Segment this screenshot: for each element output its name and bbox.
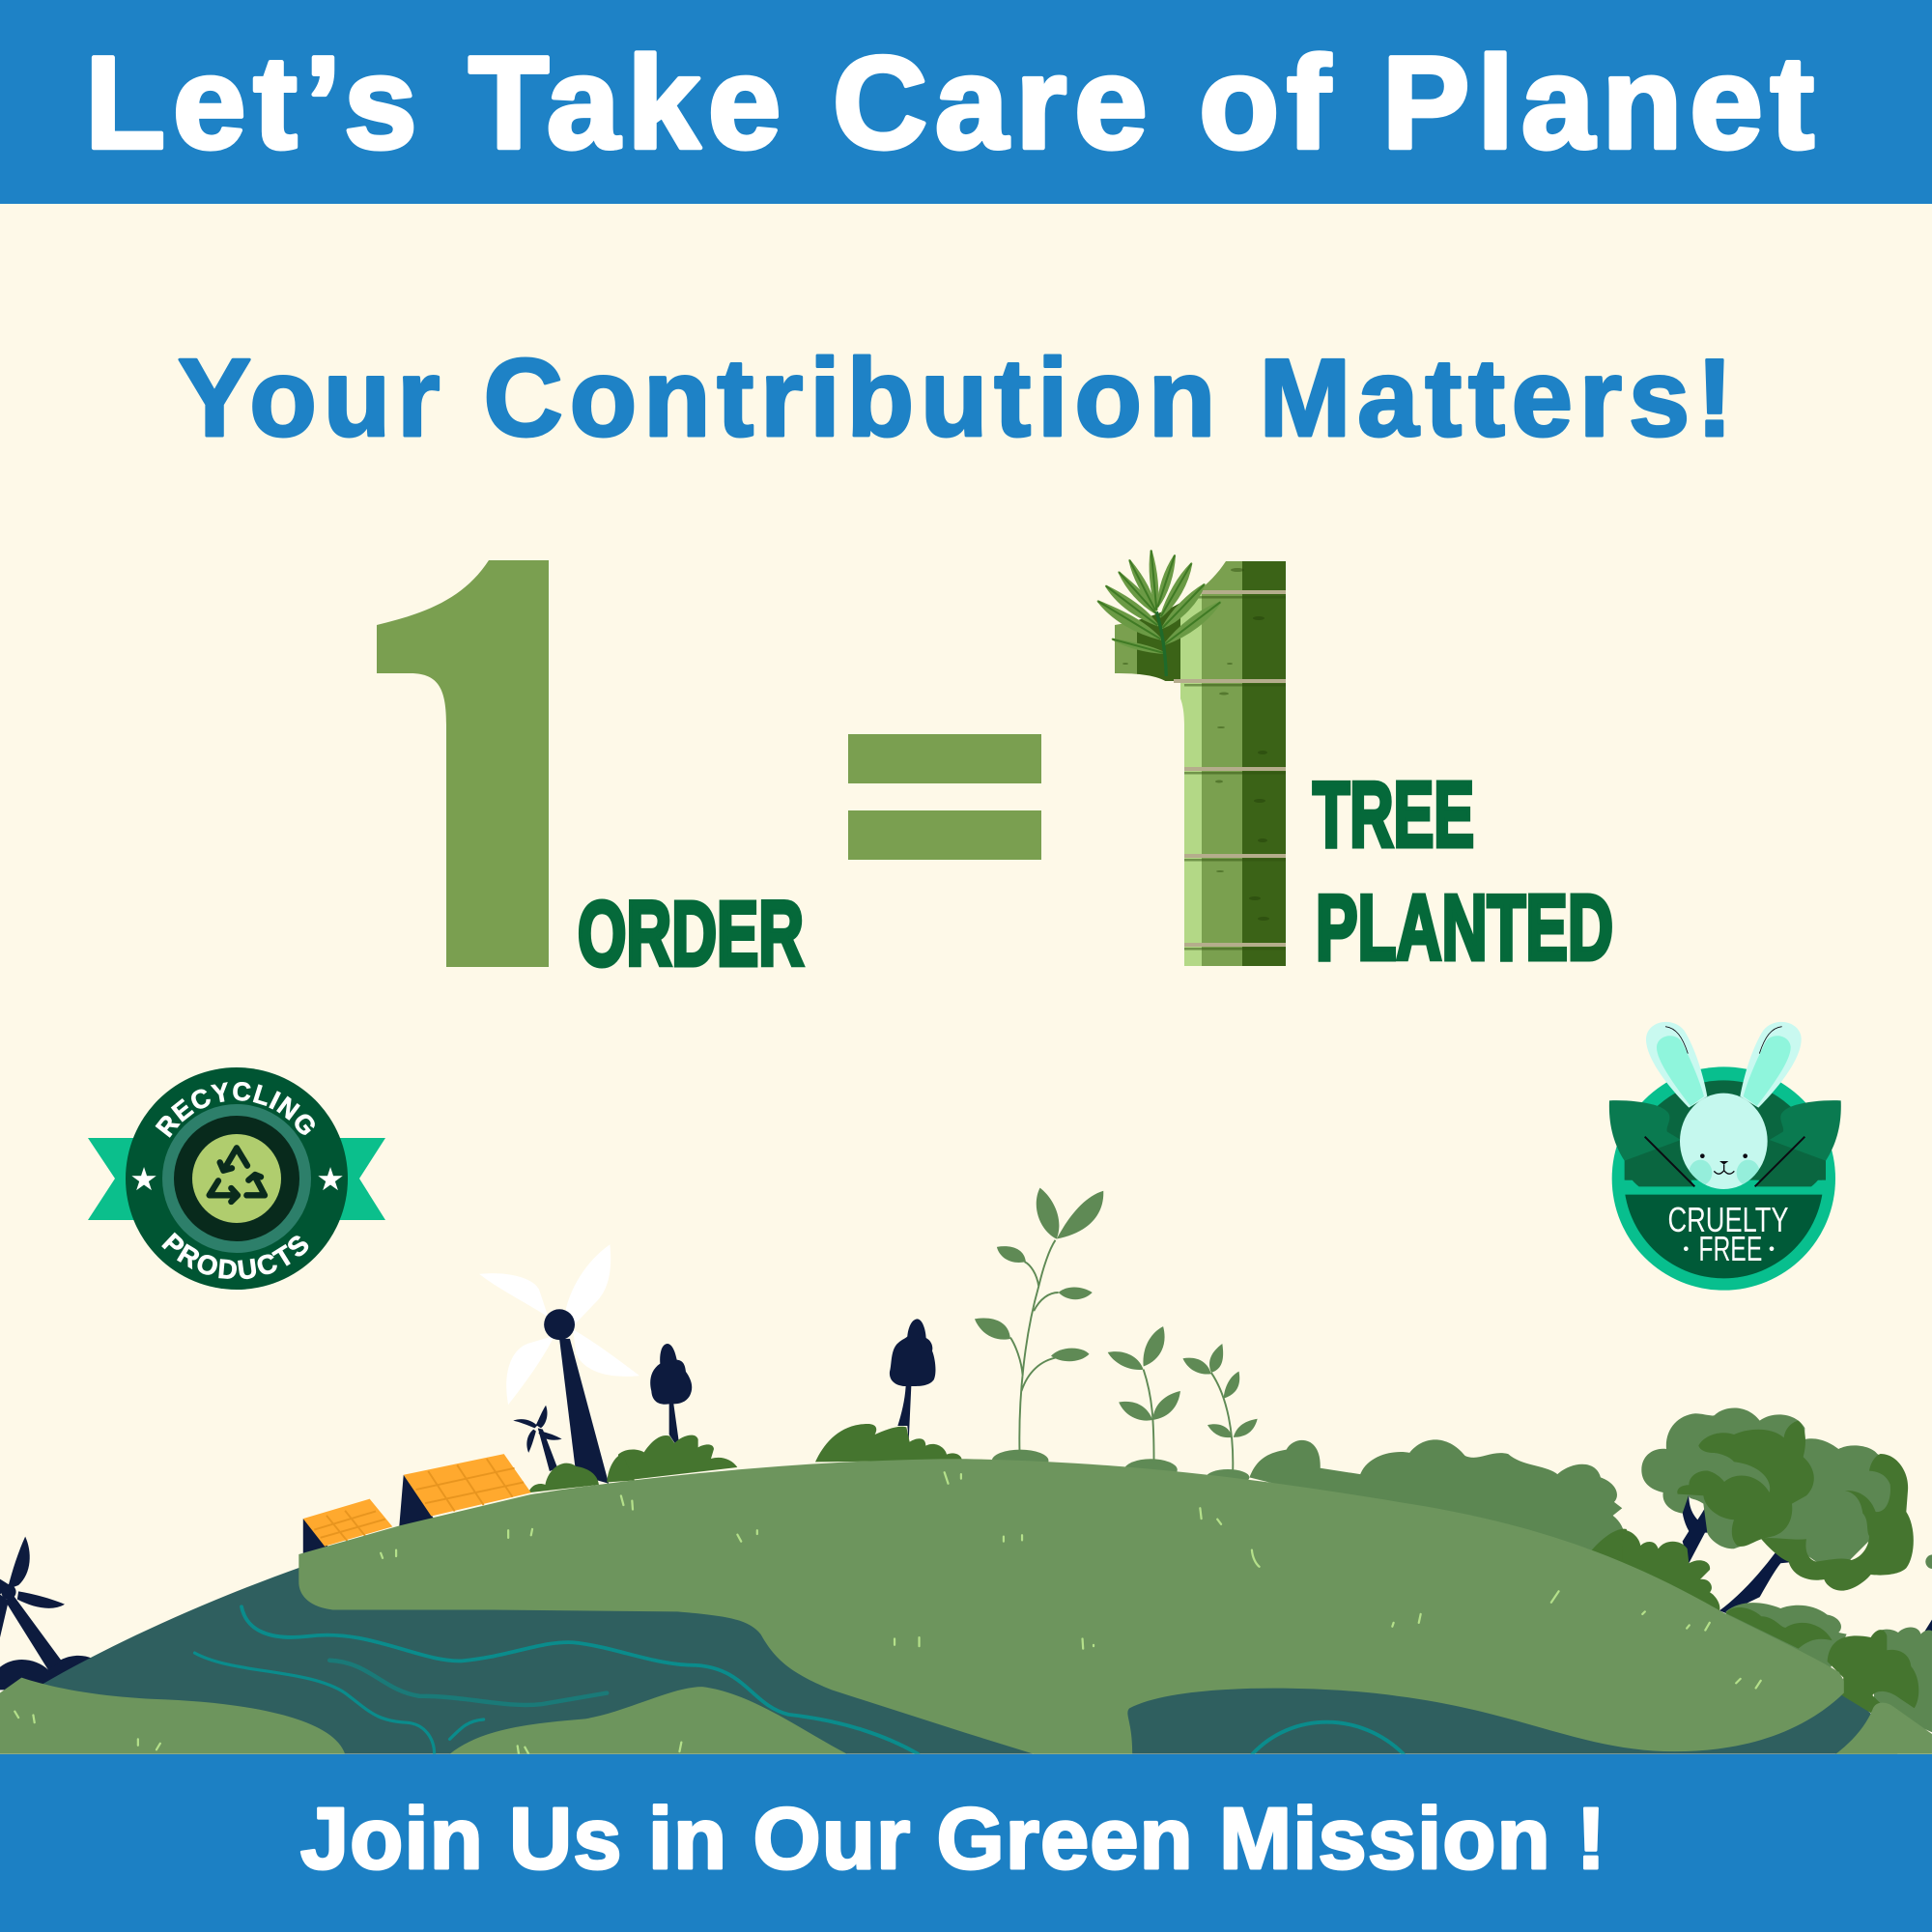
landscape illustration: [0, 1188, 1932, 1756]
grass ticks: [14, 1472, 1761, 1754]
sprout 3: [1182, 1344, 1258, 1486]
water hillside: [0, 1568, 1897, 1754]
back bush right: [1249, 1439, 1625, 1560]
small crest bush: [528, 1463, 599, 1492]
bamboo rope bands: [1174, 590, 1290, 947]
subheading: Your Contribution Matters!: [178, 337, 1733, 460]
recycling arrows icon: [210, 1148, 265, 1202]
rabbit left ear: [1646, 1022, 1707, 1108]
right trees and bush cluster: [1623, 1408, 1932, 1756]
crest bush left edge: [607, 1454, 635, 1482]
sprout 2: [1108, 1326, 1180, 1481]
badge: recycling products: [88, 1067, 385, 1290]
solar panel small: [303, 1499, 392, 1554]
curved text bottom: PRODUCTS: [161, 1233, 309, 1279]
badge stars: ★: [129, 1160, 158, 1198]
left bottom hill: [0, 1678, 345, 1754]
left leaves: [1609, 1100, 1693, 1186]
bamboo numeral one: [1098, 551, 1290, 971]
badge: cruelty free: [1609, 1022, 1841, 1291]
sprout 1: [975, 1188, 1103, 1472]
solar panel large: [399, 1454, 531, 1526]
small windmill: [513, 1406, 562, 1471]
rabbit head: [1680, 1094, 1768, 1189]
equals sign: [848, 734, 1041, 860]
badge: recycling products: ★: [316, 1160, 345, 1198]
bush joining slope: [1592, 1528, 1627, 1563]
main green hill: [298, 1459, 1844, 1754]
label: tree: TREE: [1313, 763, 1474, 867]
badge caption: [1667, 1200, 1788, 1268]
ribbon: [88, 1138, 385, 1220]
middle bottom hill: [450, 1687, 847, 1754]
label: order: ORDER: [578, 883, 804, 985]
main title: Let’s Take Care of Planet: [85, 29, 1814, 176]
numeral one: order: [377, 560, 549, 967]
palm leaves: [1098, 551, 1220, 676]
footer call to action: Join Us in Our Green Mission !: [300, 1791, 1605, 1888]
header band: [0, 0, 1932, 204]
badge caption: CRUELTY: [1667, 1200, 1788, 1239]
left wind turbine: [0, 1537, 93, 1690]
river lines: [195, 1606, 1404, 1754]
rabbit right ear: [1740, 1022, 1802, 1108]
label: planted: PLANTED: [1316, 876, 1613, 980]
badge caption: FREE: [1698, 1229, 1762, 1268]
navy trees and crest bushes: [618, 1319, 962, 1481]
curved text top: RECYCLING: [155, 1082, 315, 1138]
footer band: [0, 1754, 1932, 1932]
big windmill: [479, 1244, 639, 1484]
right leaves: [1756, 1100, 1841, 1186]
